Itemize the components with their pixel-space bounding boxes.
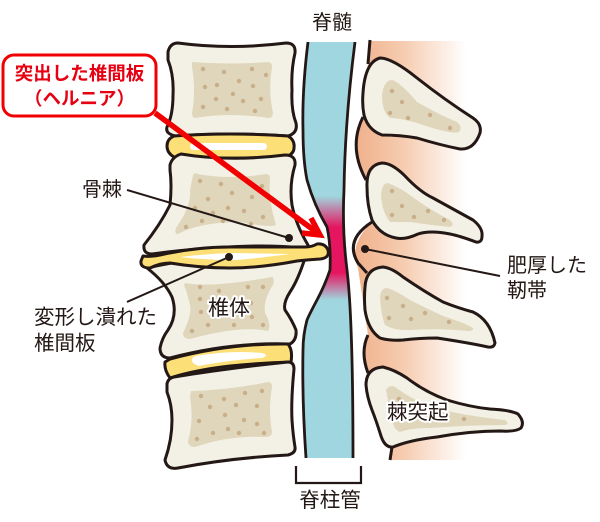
label: vertebral body: 椎体	[208, 297, 250, 320]
leader line: osteophyte	[127, 190, 293, 242]
label: spinal cord: 脊髄	[312, 11, 352, 34]
label: thickened ligament: 肥厚した	[507, 255, 587, 277]
callout: herniated disc: （ヘルニア）	[24, 88, 135, 109]
bracket: spinal canal	[296, 466, 361, 483]
label: thickened ligament	[507, 255, 587, 302]
label: deformed and crushed disc: 変形し潰れた	[34, 306, 157, 329]
spinous process 2	[367, 163, 482, 242]
vertebra 2	[144, 154, 308, 254]
label: spinal canal: 脊柱管	[299, 489, 361, 512]
leader line: thickened ligament	[361, 245, 500, 276]
vertebra 3	[147, 257, 305, 358]
spinous process 3	[364, 267, 495, 347]
label: deformed and crushed disc: 椎間板	[34, 332, 96, 355]
arrow: herniated disc	[155, 113, 320, 235]
callout: herniated disc: 突出した椎間板	[15, 63, 145, 84]
ligament tissue background	[353, 40, 466, 460]
vertebra 1	[167, 43, 296, 136]
label: thickened ligament: 靭帯	[507, 279, 547, 302]
spinal cord	[303, 42, 355, 458]
label: deformed and crushed disc	[34, 306, 157, 355]
spinous process 4	[366, 367, 522, 447]
leader line: deformed disc	[127, 253, 233, 302]
label: spinous process: 棘突起	[387, 401, 448, 424]
vertebra 4	[165, 362, 295, 468]
intervertebral disc 1	[167, 134, 294, 158]
intervertebral disc 3	[165, 344, 292, 378]
callout: herniated disc	[3, 55, 156, 116]
label: osteophyte: 骨棘	[82, 178, 122, 201]
intervertebral disc 2 (deformed)	[141, 244, 328, 268]
spinous process 1	[363, 58, 480, 149]
